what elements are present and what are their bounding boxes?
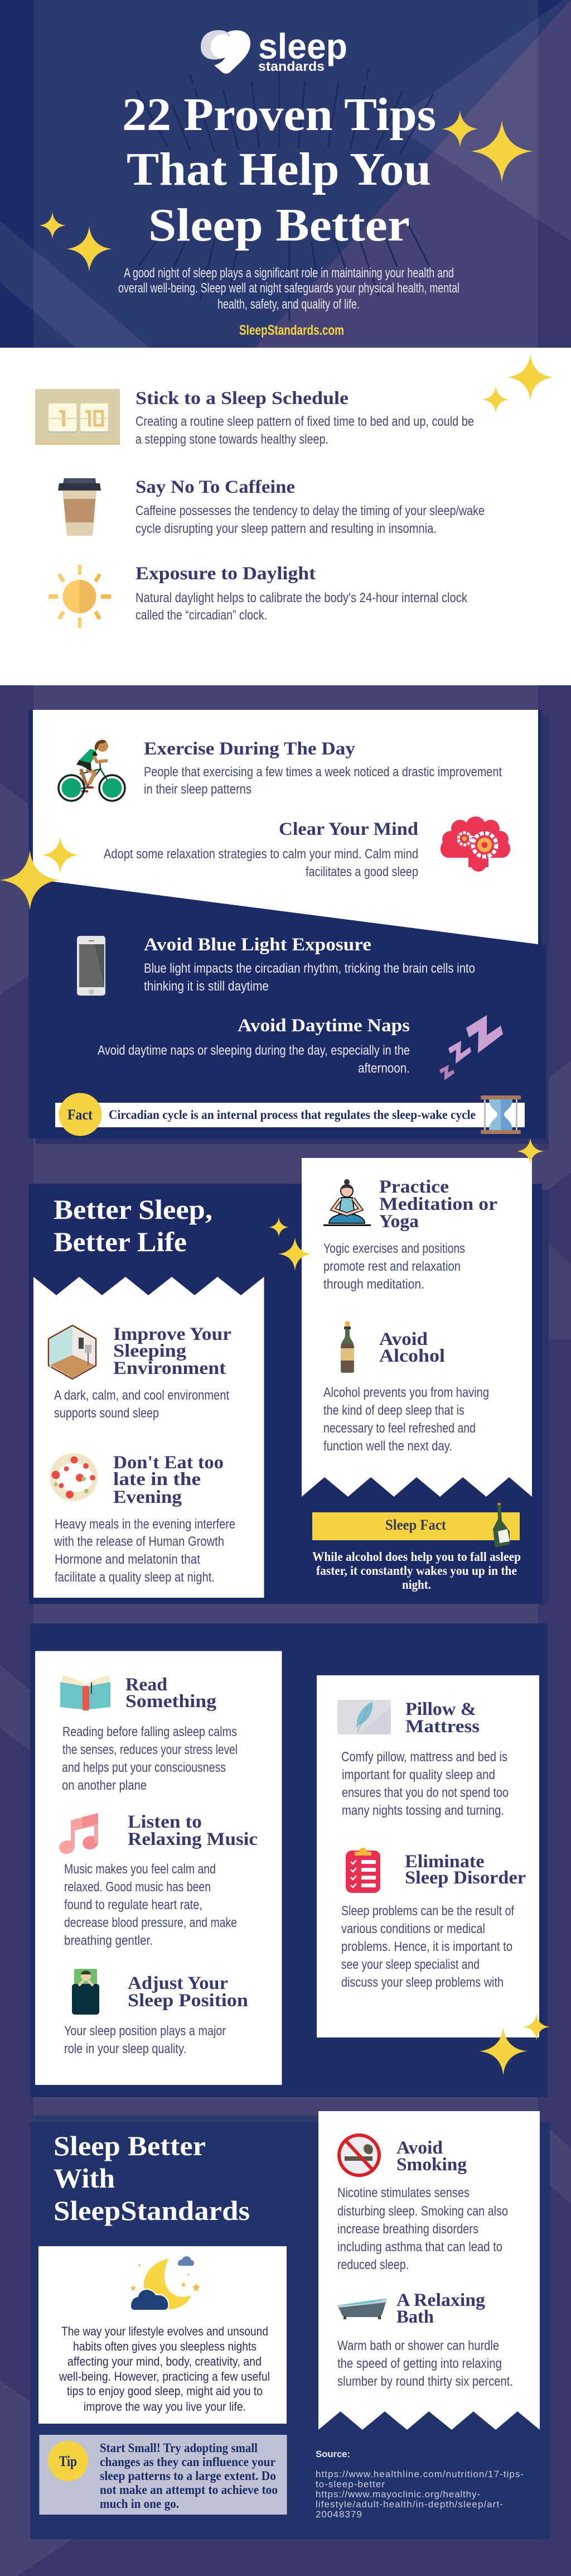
tip: eliminate sleep disorder [341,1852,526,1990]
logo [201,26,347,74]
tip: avoid alcohol: Alcohol [379,1346,445,1366]
tip: don't eat too late: with the release of Human Growth [54,1534,224,1549]
tip: listen to relaxing music: relaxed. Good music has been [64,1880,211,1895]
tip: eliminate sleep disorder: Sleep problems can be the result of [341,1904,514,1919]
tip: don't eat too late: Don't Eat too [113,1453,224,1473]
tip box: much in one go. [100,2497,179,2511]
tip: avoid alcohol: function well the next day. [323,1439,452,1454]
tip: clear your mind: Adopt some relaxation strategies to calm your mind. Calm mind [104,847,418,862]
sleep fact text: While alcohol does help you to fall asleep [312,1550,521,1564]
panel: right card [318,2111,540,2430]
tip: eliminate sleep disorder: Sleep Disorder [405,1868,526,1888]
tip: say no to caffeine: cycle disrupting your sleep pattern and resulting in insomnia. [136,521,437,536]
tip: avoid blue light exposure: Avoid Blue Light Exposure [144,935,371,955]
icon: clipboard checklist [346,1848,380,1893]
tip: practice meditation or yoga: Practice [379,1177,449,1197]
sources: 20048379 [316,2509,362,2520]
icon: flip clock [35,389,120,445]
panel: right tips card [302,1158,532,1497]
background band lower [0,685,571,2576]
tip: avoid smoking: reduced sleep. [337,2257,409,2272]
tip: avoid alcohol [323,1329,489,1454]
title: 22 Proven Tips [122,89,436,141]
icon: sleeping person [72,1969,99,2015]
icon: wine bottle [341,1321,354,1373]
tip: exercise during the day: People that exercising a few times a week noticed a drastic improvement [144,765,502,780]
sleep fact text [312,1550,521,1592]
tip: listen to relaxing music: Listen to [128,1812,202,1832]
tip: a relaxing bath: A Relaxing [396,2290,486,2310]
sleep fact banner: Sleep Fact [385,1517,446,1533]
tip: avoid blue light exposure: thinking it is still daytime [144,979,269,994]
tip: read something: on another plane [62,1778,147,1793]
tip: pillow & mattress: ensures that you do not spend too [342,1785,509,1800]
intro text: overall well-being. Sleep well at night safeguards your physical health, mental [118,281,459,296]
tip: clear your mind [104,819,418,880]
tip: pillow & mattress: Mattress [405,1717,480,1737]
sources: to-sleep-better [316,2479,385,2490]
tip: improve your sleeping environment: Sleeping [113,1341,187,1361]
icon: section four stars [480,2013,550,2075]
website link: SleepStandards.com [239,323,344,338]
logo: sleep [258,26,347,66]
tip: pillow & mattress: important for quality sleep and [342,1767,495,1782]
icon: sun [49,565,111,628]
intro paragraph: The way your lifestyle evolves and unsound [61,2324,268,2338]
intro paragraph: tips to enjoy good sleep, might aid you to [67,2384,263,2398]
tip: pillow & mattress: Pillow & [405,1699,476,1719]
tip: say no to caffeine: Say No To Caffeine [136,477,295,497]
tip box: sleep patterns to a large extent. Do [100,2469,276,2483]
heading: better sleep, better life: Better Sleep, [54,1194,212,1225]
sleep fact banner [312,1503,520,1547]
tip: stick to a sleep schedule: Creating a routine sleep pattern of fixed time to bed and up, could be [136,414,474,429]
sources: https://www.mayoclinic.org/healthy- [316,2489,480,2500]
tip: listen to relaxing music [64,1812,258,1948]
tip: stick to a sleep schedule: Stick to a Sleep Schedule [136,388,349,408]
tip: don't eat too late: Hormone and melatonin that [55,1552,200,1567]
tip: don't eat too late: Heavy meals in the evening interfere [55,1517,235,1532]
panel: right card [317,1675,539,2037]
intro paragraph: well-being. However, practicing a few useful [59,2370,270,2383]
title: Sleep Better [148,199,410,251]
tip: read something [62,1675,238,1793]
tip: eliminate sleep disorder: discuss your sleep problems with [341,1975,504,1990]
tip: listen to relaxing music: Music makes you feel calm and [64,1862,216,1877]
tip: stick to a sleep schedule [136,388,474,447]
tip: eliminate sleep disorder: problems. Hence, it is important to [341,1939,512,1954]
tip: adjust your sleep position: role in your sleep quality. [64,2041,186,2056]
tip: pillow & mattress [341,1699,509,1818]
tip: don't eat too late [54,1453,235,1585]
intro paragraph: habits often gives you sleepless nights [73,2339,257,2353]
panel: left tips card [33,1277,264,1598]
tip: clear your mind: facilitates a good sleep [306,864,418,880]
tip: exposure to daylight: Natural daylight helps to calibrate the body's 24-hour internal clock [136,590,468,605]
tip: avoid smoking: Avoid [396,2138,443,2158]
tip: adjust your sleep position: Your sleep position plays a major [64,2024,226,2039]
icon: pizza [50,1453,98,1501]
intro paragraph [59,2324,270,2414]
fact bar: Fact [67,1107,93,1123]
tip: pillow & mattress: Comfy pillow, mattress and bed is [341,1750,507,1765]
tip: say no to caffeine: Caffeine possesses the tendency to delay the timing of your sleep/wake [136,503,485,518]
tip: improve your sleeping environment: Improve Your [113,1324,231,1344]
sources: https://www.healthline.com/nutrition/17-tips- [316,2469,524,2479]
tip: avoid smoking: increase breathing disorders [337,2222,478,2237]
tip: adjust your sleep position [64,1973,248,2056]
tip: a relaxing bath: Bath [396,2307,434,2327]
panel: header background [0,0,571,348]
tip: a relaxing bath: Warm bath or shower can hurdle [337,2338,499,2353]
tip: avoid alcohol: necessary to feel refreshed and [323,1421,476,1436]
tip: say no to caffeine [136,477,485,536]
tip: improve your sleeping environment: supports sound sleep [54,1406,159,1421]
tip box: changes as they can influence your [100,2455,275,2469]
tip: stick to a sleep schedule: a stepping stone towards healthy sleep. [136,432,328,447]
icon: coffee cup [58,478,101,536]
intro paragraph: improve the way you live your life. [84,2400,246,2414]
panel: section three [29,1158,549,1604]
icon: brain with gears [441,816,510,872]
tip: practice meditation or yoga: through meditation. [323,1277,424,1292]
fact bar: Circadian cycle is an internal process that regulates the sleep-wake cycle [109,1108,476,1122]
tip: clear your mind: Clear Your Mind [279,819,418,839]
sources [316,2449,524,2520]
tip: practice meditation or yoga: Yoga [379,1212,419,1232]
icon: bathtub [337,2298,387,2319]
tip: pillow & mattress: many nights tossing and turning. [342,1803,504,1818]
sleep fact text: night. [402,1578,431,1592]
intro text [118,266,459,312]
tip: exposure to daylight: Exposure to Daylight [136,564,316,584]
tip box: Start Small! Try adopting small [100,2441,258,2455]
tip: avoid smoking: Nicotine stimulates senses [337,2185,470,2200]
heading: sleep better with sleepstandards: Sleep Better [54,2130,206,2161]
sources: Source: [316,2449,350,2459]
tip: eliminate sleep disorder: Eliminate [405,1852,484,1872]
sleep fact text: faster, it constantly wakes you up in the [316,1564,517,1578]
tip box: Tip [59,2453,77,2469]
tip box: not make an attempt to achieve too [100,2483,278,2497]
tip: listen to relaxing music: decrease blood pressure, and make [64,1915,237,1930]
tip: a relaxing bath: slumber by round thirty six percent. [337,2374,513,2389]
panel: moon card [38,2246,287,2424]
tip: don't eat too late: Evening [113,1487,182,1507]
heading: sleep better with sleepstandards: With [54,2162,115,2194]
tip: adjust your sleep position: Sleep Position [128,1991,248,2011]
tip: eliminate sleep disorder: various conditions or medical [341,1921,485,1936]
tip: read something: the senses, reduces your stress level [62,1742,238,1757]
heading: sleep better with sleepstandards [54,2130,250,2226]
tip: exercise during the day: in their sleep patterns [144,782,251,797]
intro text: health, safety, and quality of life. [217,297,360,312]
tip: listen to relaxing music: breathing gentler. [64,1933,153,1948]
tip: read something: Reading before falling asleep calms [62,1724,237,1739]
icon: stars [482,354,554,413]
tip: avoid daytime naps [98,1016,410,1076]
tip: avoid smoking: Smoking [396,2155,467,2175]
tip: don't eat too late: facilitate a quality sleep at night. [55,1570,215,1585]
intro paragraph: affecting your mind, body, creativity, and [67,2354,262,2368]
tip: read something: and helps put your consciousness [62,1760,226,1775]
icon: book [60,1676,110,1710]
tip: avoid smoking: including asthma that can lead to [337,2239,502,2255]
icon: cyclist [59,740,125,801]
icon: yoga meditation [323,1179,371,1226]
panel: left card [35,1651,282,2085]
intro text: A good night of sleep plays a significant role in maintaining your health and [124,266,454,281]
icon: hourglass [481,1095,521,1134]
icon: smartphone [77,936,105,996]
tip: avoid daytime naps: Avoid daytime naps or sleeping during the day, especially in the [98,1043,410,1058]
tip: a relaxing bath: the speed of getting into relaxing [337,2356,502,2371]
tip: practice meditation or yoga [323,1177,497,1292]
tip: avoid alcohol: Avoid [379,1329,428,1349]
tip: avoid blue light exposure [144,935,475,994]
icon: section three stars [269,1138,544,1271]
heading: sleep better with sleepstandards: SleepStandards [54,2195,250,2226]
tip: listen to relaxing music: found to regulate heart rate, [64,1897,202,1912]
tip: avoid alcohol: Alcohol prevents you from having [323,1385,489,1400]
tip: practice meditation or yoga: Meditation or [379,1194,497,1214]
tip: exercise during the day: Exercise During The Day [144,739,356,759]
tip: practice meditation or yoga: promote rest and relaxation [323,1259,461,1274]
icon: bedroom hexagon [49,1325,96,1379]
tip: improve your sleeping environment [54,1324,231,1421]
icon: zzz [439,1015,503,1080]
logo: standards [258,59,325,74]
tip: avoid smoking: disturbing sleep. Smoking can also [337,2204,508,2219]
icon: pillow with feather [337,1700,391,1734]
panel: section two [28,710,549,1144]
panel: section five [30,2111,550,2539]
tip: eliminate sleep disorder: see your sleep specialist and [341,1957,480,1972]
heading: better sleep, better life [54,1194,212,1257]
tip: adjust your sleep position: Adjust Your [128,1973,228,1993]
tip: improve your sleeping environment: A dark, calm, and cool environment [54,1388,229,1403]
title [122,89,436,251]
icon: header stars [39,110,533,272]
heading: better sleep, better life: Better Life [54,1226,187,1257]
tip: a relaxing bath [337,2290,513,2389]
tip: avoid alcohol: the kind of deep sleep that is [323,1403,464,1418]
tip box [39,2435,287,2515]
title: That Help You [127,143,431,195]
tip: read something: Read [125,1675,167,1695]
panel: section four [30,1623,550,2097]
sources: lifestyle/adult-health/in-depth/sleep/art- [316,2499,503,2510]
tip: avoid daytime naps: Avoid Daytime Naps [238,1016,410,1036]
tip: improve your sleeping environment: Environment [113,1358,226,1378]
panel: white tips section [0,348,571,685]
tip: avoid daytime naps: afternoon. [358,1061,410,1076]
tip: don't eat too late: late in the [113,1469,201,1489]
tip: practice meditation or yoga: Yogic exercises and positions [323,1241,465,1256]
fact bar [55,1093,525,1136]
tip: read something: Something [125,1691,217,1712]
icon: bottle on banner [493,1503,510,1547]
tip: listen to relaxing music: Relaxing Music [128,1829,258,1849]
tip: avoid blue light exposure: Blue light impacts the circadian rhythm, tricking the brain cells into [144,961,475,976]
icon: moon and clouds [130,2256,201,2310]
icon: music note [57,1813,100,1856]
icon: section two stars [0,837,79,910]
tip: exercise during the day [144,739,502,797]
icon: no smoking [339,2135,379,2175]
tip: exposure to daylight [136,564,468,623]
tip: exposure to daylight: called the “circadian” clock. [136,608,267,623]
tip: avoid smoking [337,2138,508,2272]
